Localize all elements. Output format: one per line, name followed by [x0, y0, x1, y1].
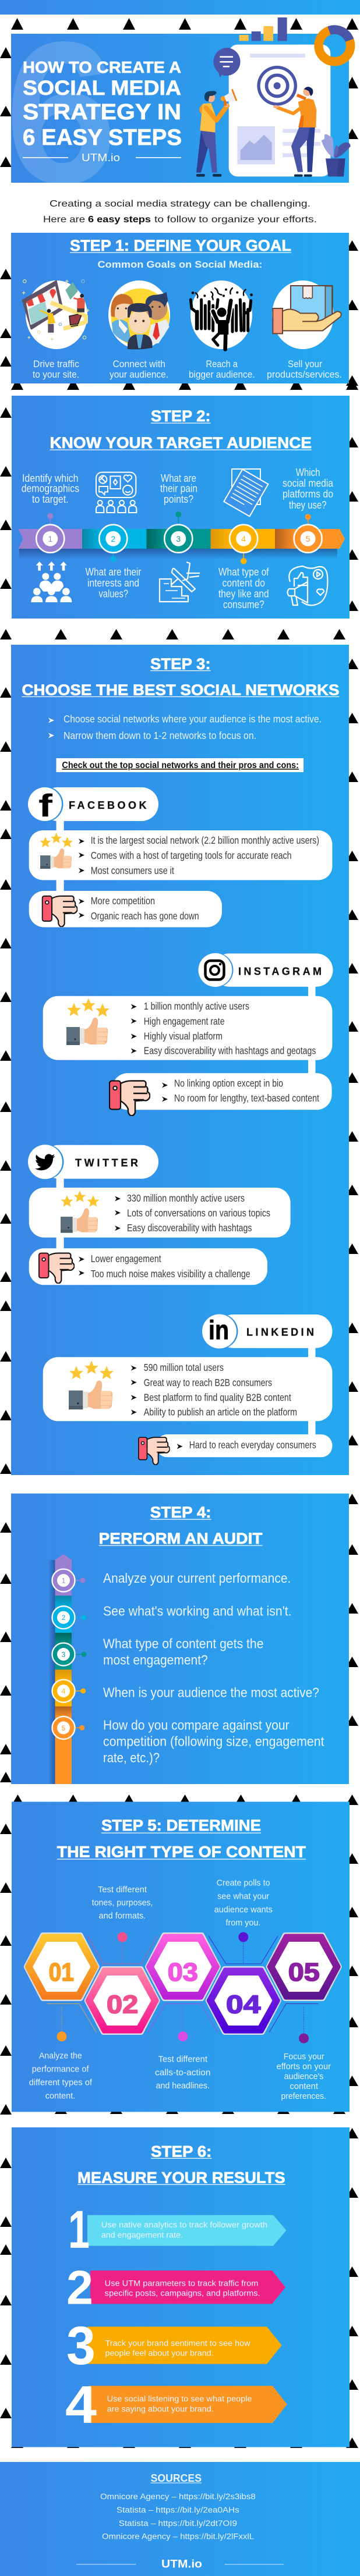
intro text: 6 easy steps [88, 215, 151, 225]
content tips: Test different [158, 2055, 208, 2065]
hexagon connectors [47, 1936, 318, 2034]
hexagon 01: 01 [49, 1958, 74, 1987]
audience questions: points? [164, 493, 193, 505]
audience questions: What are their [86, 566, 141, 578]
audience questions [22, 467, 334, 610]
twitter pros [29, 1188, 291, 1238]
content tips: content [290, 2081, 319, 2091]
audience questions: Identify which [22, 472, 78, 484]
content tips: Analyze the [39, 2051, 82, 2061]
linkedin cons [139, 1434, 332, 1465]
content tips: efforts on your [277, 2062, 331, 2072]
heading: step 6: STEP 6: [151, 2142, 211, 2160]
content tips: tones, purposes, [92, 1898, 153, 1908]
instagram pros: Easy discoverability with hashtags and geotags [144, 1045, 316, 1057]
title: STRATEGY IN [23, 100, 181, 125]
icon: traffic [22, 280, 89, 349]
footer brand: UTM.io [161, 2558, 202, 2571]
audience questions: their pain [160, 483, 197, 495]
arrow item 4: 4 [65, 2376, 97, 2435]
connector dots [57, 1932, 309, 2044]
content tips: calls-to-action [155, 2068, 211, 2077]
hexagon 03 [148, 1935, 218, 1998]
heading: step 5 [57, 1817, 306, 1861]
goal labels: Connect with [113, 358, 165, 369]
content tips: from you. [226, 1918, 260, 1928]
heading: step 3 [22, 655, 339, 699]
markers 1 to 5 [36, 525, 322, 553]
audience questions: demographics [22, 483, 79, 495]
arrow item 3: people feel about your brand. [105, 2348, 214, 2358]
heading: step 4 [99, 1504, 263, 1547]
content tips: and headlines. [156, 2081, 210, 2091]
brand line: UTM.io [82, 152, 120, 164]
hero illustration [196, 17, 351, 177]
hexagon 04 [209, 1969, 278, 2032]
intro text: Here are [43, 215, 85, 225]
audience questions: they like and [218, 588, 269, 599]
hexagon 02: 02 [107, 1990, 138, 2019]
audience questions: content do [223, 577, 265, 589]
markers 1 to 5: 1 [62, 1577, 66, 1585]
audience questions: interests and [87, 577, 139, 589]
hexagon 01 [27, 1935, 97, 1998]
audit questions: What type of content gets the [103, 1636, 263, 1651]
audience questions: Which [296, 467, 320, 478]
facebook pros: Most consumers use it [91, 865, 174, 876]
twitter cons: Too much noise makes visibility a challenge [91, 1268, 250, 1280]
goal labels: Reach a [206, 358, 238, 369]
vertical timeline [48, 1554, 86, 1784]
facebook pros: Comes with a host of targeting tools for accurate reach [91, 850, 292, 861]
audience questions: to target. [32, 493, 69, 505]
source list: Omnicore Agency – https://bit.ly/2lFxxlL [102, 2532, 255, 2541]
linkedin cons: Hard to reach everyday consumers [189, 1439, 316, 1451]
content tips [29, 1878, 331, 2101]
twitter pros: Easy discoverability with hashtags [127, 1222, 252, 1234]
hexagon 03: 03 [168, 1958, 198, 1987]
panel: step 2 [12, 396, 350, 619]
arrow item 4: are saying about your brand. [107, 2404, 214, 2413]
hexagon 04: 04 [226, 1990, 261, 2019]
title [23, 58, 182, 150]
panel: hero [11, 17, 355, 183]
twitter cons: Lower engagement [91, 1253, 161, 1264]
arrow item 2: specific posts, campaigns, and platforms. [105, 2289, 260, 2298]
callout [56, 758, 303, 772]
heading: step 6 [77, 2142, 285, 2187]
heading: step 5: THE RIGHT TYPE OF CONTENT [57, 1843, 306, 1861]
content tips: see what your [217, 1892, 269, 1902]
content tips: performance of [32, 2065, 89, 2074]
audit questions: most engagement? [103, 1653, 208, 1668]
source list: Omnicore Agency – https://bit.ly/2s3ibs8 [100, 2492, 256, 2501]
audit questions: Analyze your current performance. [103, 1571, 291, 1586]
instagram pros: High engagement rate [144, 1015, 225, 1027]
twitter pros: Lots of conversations on various topics [127, 1207, 270, 1219]
panel: step 3 [11, 645, 349, 1475]
audience questions: What type of [218, 566, 269, 578]
heading: step 1: STEP 1: DEFINE YOUR GOAL [70, 237, 291, 254]
icon: bigger audience [190, 280, 253, 349]
top bar [0, 0, 360, 15]
audience questions: values? [99, 588, 128, 599]
panel: step 6 [12, 2127, 350, 2447]
goal labels: Sell your [288, 358, 322, 369]
heading: step 3: CHOOSE THE BEST SOCIAL NETWORKS [22, 681, 339, 699]
arrow item 1: and engagement rate. [101, 2230, 183, 2239]
instagram cons: No room for lengthy, text-based content [174, 1092, 319, 1104]
network: linkedin [43, 1314, 332, 1465]
network: twitter [28, 1145, 291, 1285]
content tips: Test different [98, 1885, 147, 1895]
hexagon 05 [269, 1935, 339, 1998]
goal labels: bigger audience. [189, 369, 255, 380]
instagram pros: Highly visual platform [144, 1031, 223, 1042]
icon: demographics grid [96, 472, 136, 513]
markers 1 to 5: 4 [241, 534, 246, 543]
intro text: to follow to organize your efforts. [154, 215, 317, 225]
goal labels: Drive traffic [33, 358, 79, 369]
heading: step 3: STEP 3: [150, 655, 211, 673]
heading: step 4: STEP 4: [150, 1504, 211, 1521]
instagram label [198, 953, 333, 987]
instagram cons: No linking option except in bio [174, 1078, 283, 1089]
audit questions [103, 1571, 324, 1765]
content tips: content. [45, 2091, 75, 2101]
instagram label: INSTAGRAM [238, 965, 322, 977]
facebook cons: More competition [91, 895, 155, 907]
twitter pros: 330 million monthly active users [127, 1192, 245, 1204]
audience questions: social media [283, 477, 334, 489]
footer [0, 2462, 360, 2576]
audit questions: rate, etc.)? [103, 1750, 160, 1765]
sources heading: SOURCES [151, 2472, 202, 2484]
twitter label: TWITTER [75, 1157, 138, 1168]
content tips: Create polls to [217, 1878, 270, 1888]
panel: step 1 [11, 233, 349, 383]
subheading: Common Goals on Social Media: [98, 259, 262, 270]
content tips: Focus your [284, 2052, 324, 2062]
linkedin pros: Best platform to find quality B2B content [144, 1391, 291, 1403]
arrow item 3 [66, 2315, 282, 2376]
markers 1 to 5: 3 [62, 1650, 66, 1658]
icon: audience arrows [31, 562, 72, 602]
content tips: and formats. [99, 1911, 146, 1921]
arrow item 1: Use native analytics to track follower growth [101, 2220, 267, 2229]
twitter cons [29, 1248, 267, 1285]
content tips: different types of [29, 2077, 93, 2088]
linkedin label: in [209, 1315, 229, 1345]
heading: step 4: PERFORM AN AUDIT [99, 1530, 263, 1547]
arrow item 1 [68, 2200, 287, 2259]
markers 1 to 5: 5 [62, 1724, 66, 1732]
markers 1 to 5: 1 [48, 534, 52, 543]
linkedin pros [43, 1357, 332, 1421]
facebook label: FACEBOOK [69, 800, 147, 811]
title: SOCIAL MEDIA [23, 77, 181, 100]
linkedin pros: 590 million total users [144, 1362, 224, 1373]
connector [308, 983, 316, 1076]
goal labels: to your site. [33, 369, 79, 380]
source list: Statista – https://bit.ly/2dt7OI9 [119, 2519, 237, 2528]
instagram pros [43, 996, 332, 1060]
content tips: audience's [284, 2072, 323, 2081]
heading: step 5: STEP 5: DETERMINE [101, 1817, 261, 1834]
arrow item 4 [65, 2376, 287, 2435]
connector [57, 818, 64, 893]
title: 6 EASY STEPS [23, 125, 182, 150]
panel: step 4 [11, 1494, 349, 1784]
content tips: preferences. [281, 2091, 326, 2101]
goal labels: your audience. [110, 369, 168, 380]
connector [308, 1344, 316, 1437]
arrow item 3: 3 [66, 2315, 96, 2376]
facebook cons: Organic reach has gone down [91, 910, 199, 922]
bullet list: Choose social networks where your audience is the most active. [63, 713, 322, 725]
heading: step 2: KNOW YOUR TARGET AUDIENCE [50, 434, 312, 452]
icon: sell [272, 280, 341, 349]
audit questions: How do you compare against your [103, 1718, 290, 1733]
bullet list: Narrow them down to 1-2 networks to focus on. [63, 730, 256, 741]
markers 1 to 5: 5 [306, 534, 310, 543]
markers 1 to 5: 2 [62, 1614, 66, 1622]
intro text [43, 199, 317, 225]
facebook label: f [38, 787, 53, 823]
heading: step 6: MEASURE YOUR RESULTS [77, 2169, 285, 2187]
icon: social megaphone [288, 566, 327, 605]
instagram pros: 1 billion monthly active users [144, 1000, 249, 1012]
heading: step 2 [50, 407, 312, 452]
audience questions: What are [161, 472, 196, 484]
timeline ribbon [19, 511, 345, 564]
arrow item 4: Use social listening to see what people [107, 2394, 252, 2403]
linkedin pros: Ability to publish an article on the platform [144, 1406, 297, 1418]
facebook cons [29, 891, 222, 928]
icon: document pages [224, 469, 268, 516]
audience questions: consume? [223, 599, 264, 610]
markers 1 to 5: 3 [176, 534, 181, 543]
arrow item 3: Track your brand sentiment to see how [105, 2339, 250, 2347]
panel: step 5 [12, 1802, 350, 2112]
markers 1 to 5: 4 [62, 1687, 66, 1696]
network: instagram [43, 953, 333, 1115]
linkedin pros: Great way to reach B2B consumers [144, 1377, 272, 1388]
heading: step 2: STEP 2: [151, 407, 211, 425]
icon: falling on stairs [160, 562, 200, 602]
title: HOW TO CREATE A [23, 58, 181, 76]
facebook pros [29, 830, 332, 880]
arrow item 2: 2 [66, 2260, 93, 2314]
content tips: audience wants [214, 1905, 273, 1915]
source list: Statista – https://bit.ly/2ea0AHs [117, 2506, 239, 2514]
arrow item 2 [66, 2260, 285, 2314]
connector [57, 1175, 64, 1251]
arrow item 1: 1 [68, 2200, 90, 2259]
instagram cons [110, 1073, 332, 1115]
markers 1 to 5 [52, 1569, 75, 1739]
bullet list [48, 713, 322, 741]
linkedin label: LINKEDIN [246, 1326, 314, 1338]
network: facebook [28, 787, 332, 928]
twitter label [28, 1145, 158, 1179]
intro text: Creating a social media strategy can be challenging. [50, 199, 310, 209]
arrow item 2: Use UTM parameters to track traffic from [105, 2279, 258, 2288]
icon: connect [108, 280, 170, 349]
goal labels: products/services. [267, 369, 342, 380]
audit questions: See what's working and what isn't. [103, 1604, 292, 1619]
goal labels [33, 358, 342, 380]
hexagon 02 [87, 1969, 157, 2032]
linkedin label [202, 1314, 332, 1349]
facebook label [28, 787, 158, 823]
markers 1 to 5: 2 [111, 534, 115, 543]
hexagon 05: 05 [288, 1958, 320, 1987]
audience questions: platforms do [283, 488, 333, 500]
audit questions: competition (following size, engagement [103, 1734, 324, 1749]
audit questions: When is your audience the most active? [103, 1685, 319, 1700]
big background numeral: 6 [5, 0, 118, 226]
audience questions: they use? [289, 499, 326, 511]
source list [100, 2492, 256, 2541]
callout: Check out the top social networks and their pros and cons: [62, 761, 299, 770]
